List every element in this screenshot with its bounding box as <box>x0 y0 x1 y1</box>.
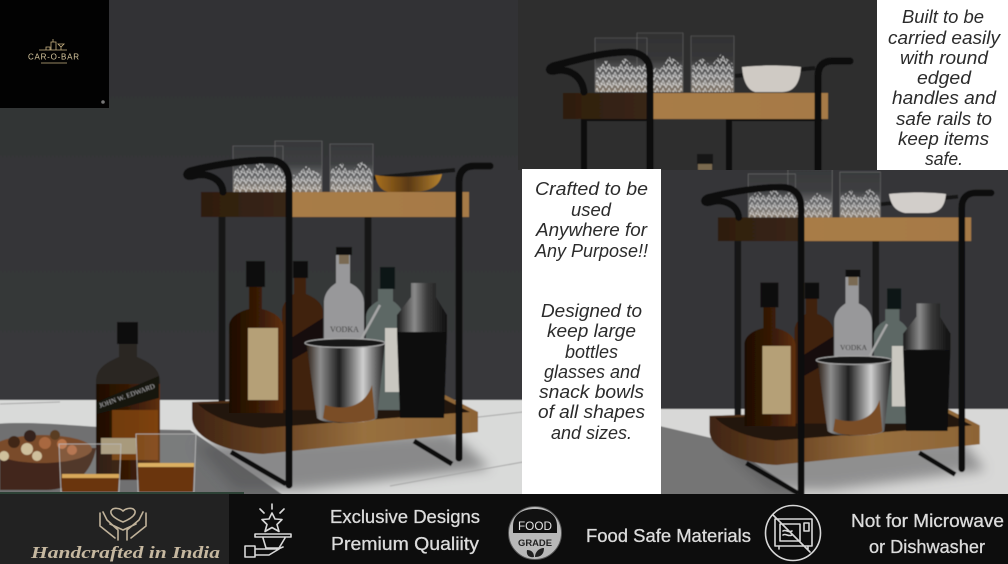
caption lines: Crafted to be <box>535 179 648 199</box>
panel: purpose caption: of all shapes <box>538 402 645 422</box>
panel: main product photo <box>0 0 523 500</box>
two-tier cart <box>187 141 490 485</box>
vodka label: VODKA <box>330 325 359 334</box>
marble tabletop <box>0 400 523 500</box>
panel: handle close-up photo <box>512 0 884 176</box>
handcrafted label: Handcrafted in India <box>30 543 221 562</box>
panel: purpose caption: keep large <box>547 321 636 341</box>
whisky bottle on table <box>96 322 160 480</box>
icon: crossed-out microwave <box>766 506 820 560</box>
feature: exclusive designs <box>245 504 480 557</box>
whisky glass left <box>59 444 121 492</box>
feature text: Exclusive Designs <box>330 507 480 527</box>
rear rails <box>584 118 822 176</box>
panel: carry caption: keep items <box>898 129 989 149</box>
panel: purpose caption: bottles <box>565 342 618 362</box>
gold bowl <box>375 174 442 192</box>
cut-crystal glasses <box>595 33 734 92</box>
panel: purpose caption: Designed to <box>541 301 642 321</box>
bowl of nuts <box>0 430 96 490</box>
panel: carry caption: safe. <box>925 149 963 169</box>
feature: not for microwave <box>766 506 1004 560</box>
bottle tip <box>697 154 713 164</box>
panel: second cart photo <box>655 160 1008 499</box>
panel: purpose caption: and sizes. <box>551 423 632 443</box>
whisky glass right <box>136 434 196 492</box>
panel: purpose caption: glasses and <box>544 362 641 382</box>
panel: carry caption: carried easily <box>888 28 1001 48</box>
white bowl <box>742 66 801 92</box>
feature text: Not for Microwave <box>851 511 1004 531</box>
panel: bottom feature bar <box>0 492 1008 564</box>
two-tier cart <box>704 169 991 494</box>
vodka label: VODKA <box>840 343 868 352</box>
panel: carry caption: safe rails to <box>896 109 992 129</box>
caption lines: Built to be <box>902 7 984 27</box>
handles and posts <box>549 52 650 176</box>
panel: carry caption: handles and <box>892 88 997 108</box>
panel: purpose caption <box>522 169 661 494</box>
marble tabletop <box>655 409 1008 499</box>
icon: food grade badge: GRADE <box>518 538 552 548</box>
badge: handcrafted in India <box>0 492 244 564</box>
icon: food grade badge <box>508 506 562 560</box>
white bowl <box>889 192 946 213</box>
panel: carry caption <box>877 0 1008 170</box>
panel: purpose caption: Anywhere for <box>535 220 648 240</box>
logo mark <box>39 39 67 63</box>
feature: food safe materials <box>508 506 751 560</box>
wall background <box>0 0 523 402</box>
logo wordmark: CAR-O-BAR <box>28 52 79 62</box>
panel: carry caption: with round <box>900 48 989 68</box>
icon: hands with heart <box>100 508 146 540</box>
panel: purpose caption: snack bowls <box>539 382 644 402</box>
icon: star on serving tray <box>245 504 291 557</box>
panel: purpose caption: used <box>571 200 612 220</box>
panel: carry caption: edged <box>917 68 972 88</box>
wooden tray <box>563 93 828 119</box>
feature text: Food Safe Materials <box>586 526 751 546</box>
panel: logo block <box>0 0 109 108</box>
icon: food grade badge: FOOD <box>518 521 552 533</box>
panel: purpose caption: Any Purpose!! <box>534 241 648 261</box>
whisky bottle on table: JOHN W. EDWARD <box>98 382 156 410</box>
feature: not for microwave: or Dishwasher <box>869 537 985 557</box>
feature: exclusive designs: Premium Qualiity <box>331 534 479 554</box>
